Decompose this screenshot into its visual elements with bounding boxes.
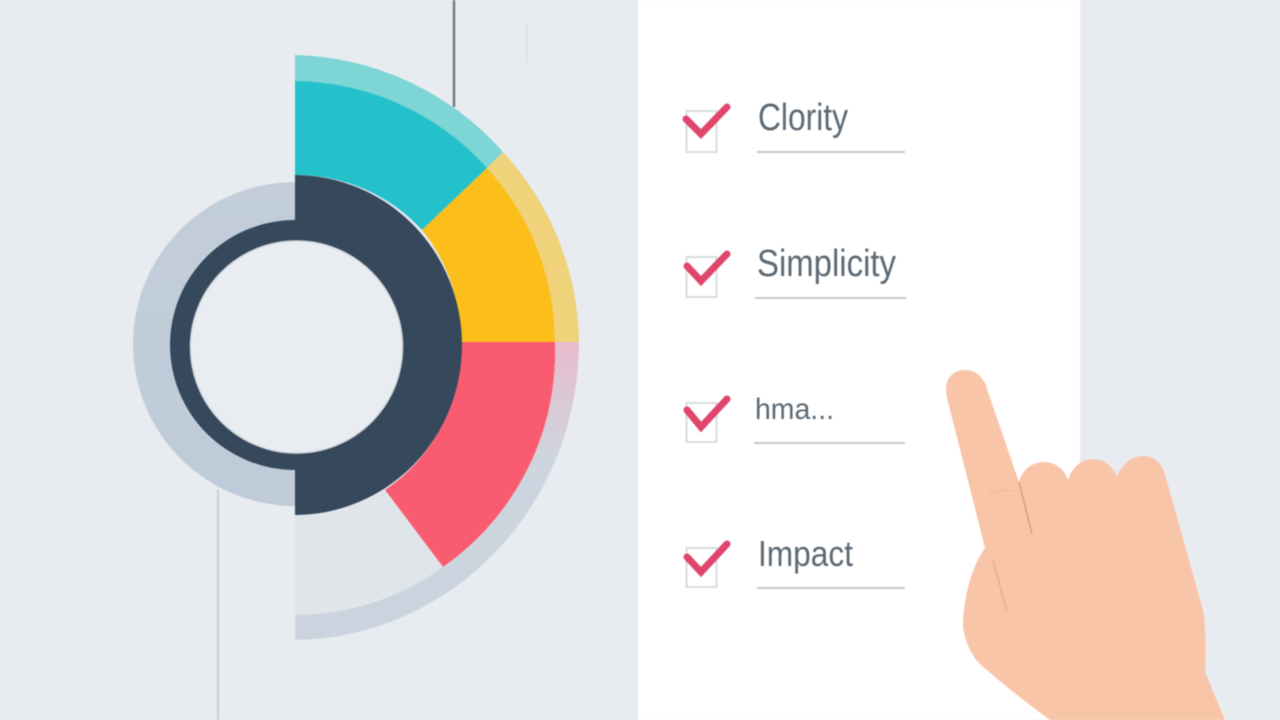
- icon: pointing hand: [946, 370, 1225, 720]
- item: Clarity: Clority: [758, 97, 848, 139]
- segment: yellow outer band: [487, 152, 579, 342]
- chart: segmented radial diagram: [133, 55, 579, 640]
- checklist: [686, 97, 906, 588]
- item: truncated label: [686, 393, 905, 443]
- ring: light grey left half: [133, 182, 295, 506]
- centre circle: [190, 241, 402, 453]
- item: Impact: [686, 533, 905, 588]
- segment: grey and pink outer band: [295, 342, 579, 640]
- ring: dark navy: [170, 175, 462, 515]
- item: Impact: Impact: [758, 533, 853, 574]
- item: Clarity: [686, 97, 905, 152]
- segment: red: [385, 342, 555, 567]
- segment: teal outer band: [295, 55, 503, 168]
- segment: yellow: [422, 168, 555, 342]
- segment: teal: [295, 81, 487, 230]
- item: truncated label: hma...: [755, 393, 834, 426]
- segment: pale grey wedge: [295, 490, 443, 615]
- item: Simplicity: [686, 243, 906, 298]
- item: Simplicity: Simplicity: [757, 243, 896, 285]
- panel: white checklist sheet: [638, 0, 1080, 720]
